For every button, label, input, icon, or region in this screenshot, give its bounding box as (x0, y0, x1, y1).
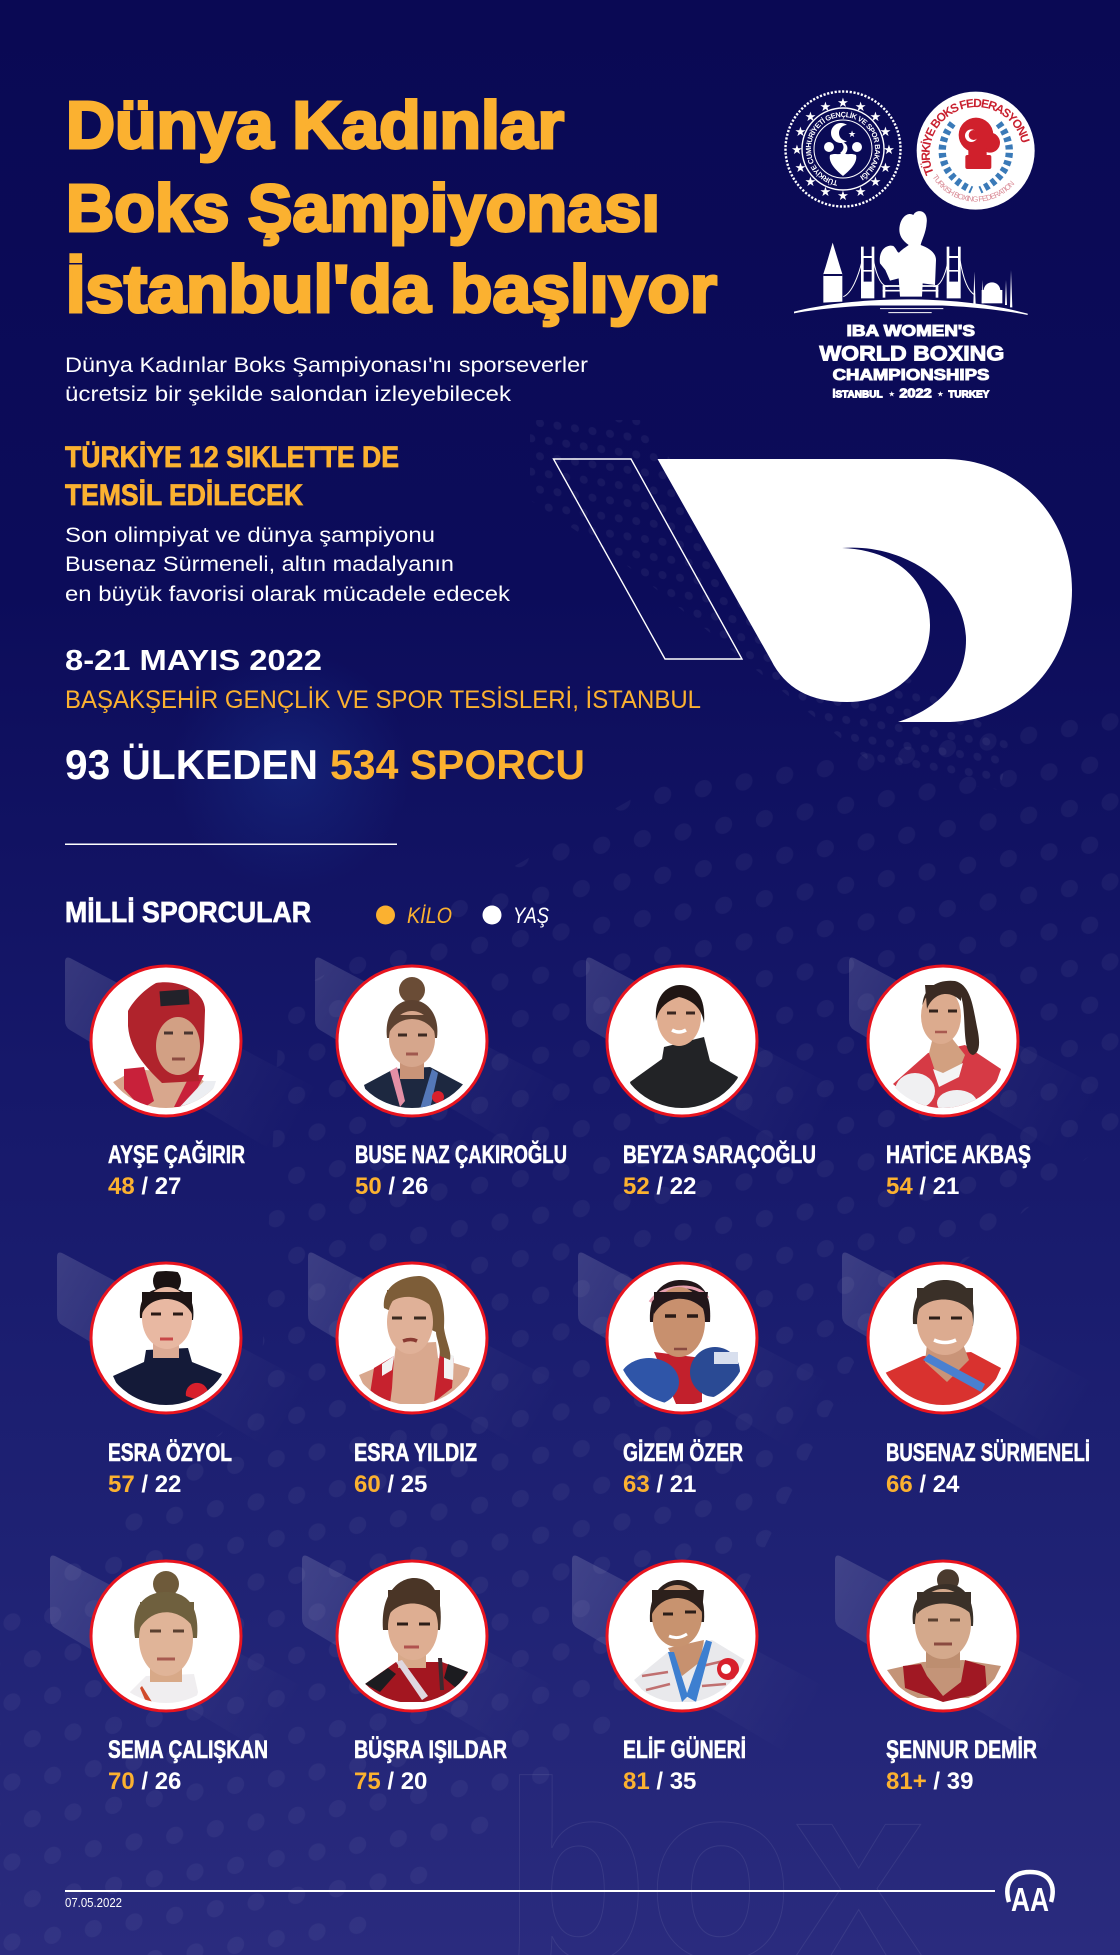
logo: ministry seal: ★ (795, 124, 806, 139)
portrait (337, 1263, 487, 1413)
athlete card: Büşra Işıldar (337, 1561, 507, 1795)
logo: ministry seal: TÜRKİYE CUMHURİYETİ GENÇLİK VE SPOR BAKANLIĞI (806, 112, 880, 186)
logo: ministry seal: ★ (870, 174, 881, 189)
logo: ministry seal: ★ (855, 99, 866, 114)
athlete card: Sema Çalışkan (91, 1561, 268, 1795)
paragraph: Son olimpiyat ve dünya şampiyonu (65, 524, 435, 547)
title (66, 88, 717, 327)
logo: ministry seal: ★ (855, 184, 866, 199)
weight and age: 60 / 25 (354, 1471, 427, 1498)
athlete card: Hatice Akbaş (868, 966, 1031, 1200)
venue: BAŞAKŞEHİR GENÇLİK VE SPOR TESİSLERİ, İSTANBUL (65, 685, 701, 714)
name: HATİCE AKBAŞ (886, 1141, 1031, 1169)
logo: ministry seal: ★ (795, 160, 806, 175)
weight and age: 50 / 26 (355, 1173, 428, 1200)
portrait (868, 1263, 1018, 1413)
logo: ministry seal: ★ (870, 109, 881, 124)
portrait (607, 966, 757, 1116)
title: Boks Şampiyonası (66, 171, 660, 246)
paragraph (65, 524, 511, 606)
athlete card: Busenaz Sürmeneli (868, 1263, 1090, 1498)
name: SEMA ÇALIŞKAN (108, 1736, 268, 1764)
section heading: 12 weights: TEMSİL EDİLECEK (65, 479, 303, 512)
portrait (868, 1561, 1018, 1711)
weight and age: 70 / 26 (108, 1768, 181, 1795)
athlete card: Buse Naz Çakıroğlu (337, 966, 567, 1200)
logo: ministry seal: ★ (883, 142, 895, 157)
portrait (868, 966, 1018, 1116)
weight and age: 63 / 21 (623, 1471, 696, 1498)
background streaks behind portraits (50, 958, 1114, 1783)
name: BEYZA SARAÇOĞLU (623, 1140, 816, 1169)
title: Dünya Kadınlar (66, 88, 564, 163)
section heading: 12 weights (65, 441, 399, 512)
athlete card: Beyza Saraçoğlu (607, 966, 816, 1200)
subtitle: Dünya Kadınlar Boks Şampiyonası'nı sporseverler (65, 354, 588, 377)
portrait (91, 966, 241, 1116)
logo: ministry seal (784, 90, 902, 208)
name: AYŞE ÇAĞIRIR (108, 1140, 245, 1169)
portrait (91, 1263, 241, 1413)
subtitle (65, 354, 588, 406)
logo: boxing federation: TURKISH BOXING FEDERATION (933, 174, 1014, 202)
name: ŞENNUR DEMİR (886, 1736, 1037, 1764)
weight and age: 54 / 21 (886, 1173, 959, 1200)
small dot pattern (530, 420, 1020, 800)
footer rule (65, 1890, 995, 1892)
weight and age: 81 / 35 (623, 1768, 696, 1795)
logo: IBA championship emblem: ★ (888, 390, 895, 399)
heading: national athletes: MİLLİ SPORCULAR (65, 897, 311, 929)
legend (376, 903, 549, 928)
portrait (607, 1561, 757, 1711)
weight and age: 52 / 22 (623, 1173, 696, 1200)
participants count: 534 SPORCU (330, 741, 585, 788)
logo: IBA championship emblem (794, 211, 1028, 400)
logo: ministry seal: ★ (820, 184, 831, 199)
name: ESRA ÖZYOL (108, 1438, 232, 1467)
logo: ministry seal: ★ (880, 124, 891, 139)
subtitle: ücretsiz bir şekilde salondan izleyebilecek (65, 383, 512, 406)
logo: IBA championship emblem: TURKEY (948, 389, 989, 400)
logo: IBA championship emblem: IBA WOMEN'S (847, 323, 975, 340)
logo: boxing federation: TÜRKİYE BOKS FEDERASYONU (920, 98, 1030, 176)
date: 07.05.2022 (65, 1895, 122, 1910)
logo shape: white swoosh (554, 459, 1072, 722)
logo: ministry seal: ★ (837, 188, 849, 203)
participants count: 93 ÜLKEDEN (65, 741, 318, 788)
logo: ministry seal: ★ (805, 109, 816, 124)
weight and age: 66 / 24 (886, 1471, 960, 1498)
name: BÜŞRA IŞILDAR (354, 1735, 507, 1764)
logo: ministry seal: ★ (805, 174, 816, 189)
logo: ministry seal: ★ (837, 95, 849, 110)
name: ESRA YILDIZ (354, 1439, 477, 1467)
athlete card: Elif Güneri (607, 1561, 757, 1795)
divider (65, 844, 397, 845)
participants count (65, 741, 585, 788)
athlete card: Ayşe Çağırır (91, 966, 245, 1200)
athlete card: Şennur Demir (868, 1561, 1037, 1795)
dates: 8-21 MAYIS 2022 (65, 645, 322, 677)
logo: IBA championship emblem: CHAMPIONSHIPS (833, 367, 990, 384)
logo: IBA championship emblem: WORLD BOXING (819, 341, 1004, 366)
title: İstanbul'da başlıyor (66, 252, 717, 327)
logo: IBA championship emblem: ★ (937, 390, 944, 399)
weight and age: 81+ / 39 (886, 1768, 973, 1795)
weight and age: 75 / 20 (354, 1768, 427, 1795)
portrait (337, 1561, 487, 1711)
athlete card: Gizem Özer (607, 1263, 757, 1498)
logo: ministry seal: ★ (848, 129, 856, 139)
portrait (337, 966, 487, 1116)
big dot pattern (0, 700, 1120, 1955)
paragraph: Busenaz Sürmeneli, altın madalyanın (65, 553, 454, 576)
logo: ministry seal: ★ (880, 160, 891, 175)
athlete card: Esra Yıldız (337, 1263, 487, 1498)
name: GİZEM ÖZER (623, 1438, 743, 1467)
logo: IBA championship emblem: İSTANBUL (833, 387, 883, 400)
weight and age: 57 / 22 (108, 1471, 181, 1498)
portrait (607, 1263, 757, 1413)
icon: AA agency logo: AA (1011, 1881, 1049, 1918)
name: ELİF GÜNERİ (623, 1735, 746, 1764)
logo: ministry seal: ★ (820, 99, 831, 114)
icon: AA agency logo (1007, 1872, 1053, 1918)
portrait (91, 1561, 241, 1711)
legend: KİLO (407, 903, 452, 928)
section heading: 12 weights: TÜRKİYE 12 SIKLETTE DE (65, 441, 399, 474)
logo: ministry seal: ★ (791, 142, 803, 157)
logo: IBA championship emblem: 2022 (899, 386, 932, 400)
name: BUSE NAZ ÇAKIROĞLU (355, 1140, 567, 1169)
paragraph: en büyük favorisi olarak mücadele edecek (65, 583, 511, 606)
weight and age: 48 / 27 (108, 1173, 181, 1200)
blue glow (170, 650, 410, 890)
legend: YAŞ (513, 903, 549, 928)
athlete card: Esra Özyol (91, 1263, 241, 1498)
logo: boxing federation (916, 92, 1035, 210)
